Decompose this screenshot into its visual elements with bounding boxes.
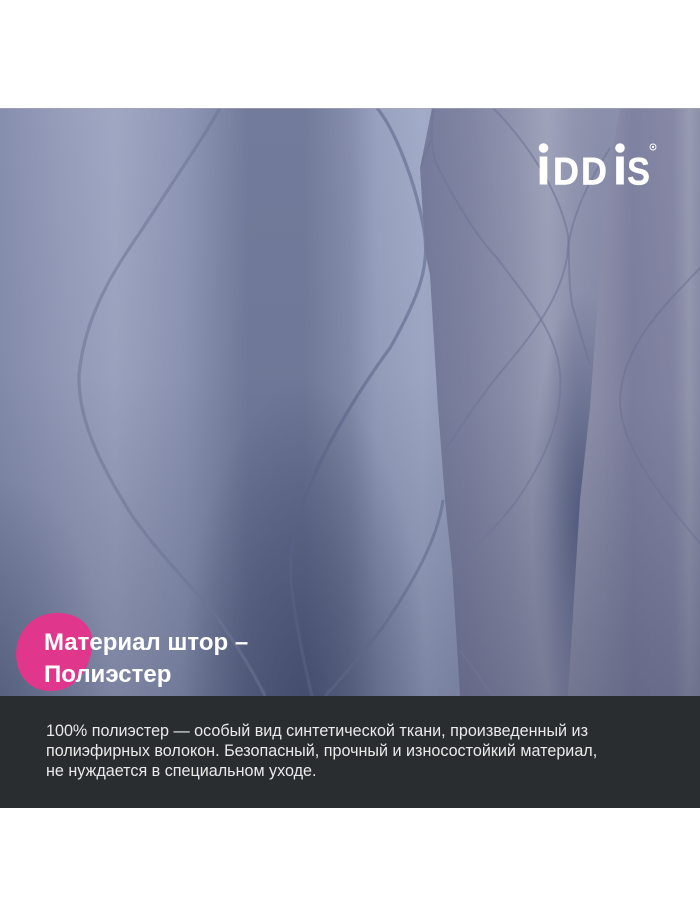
logo: IDDIS: i (536, 138, 551, 196)
logo: IDDIS (538, 143, 656, 186)
logo: IDDIS: D (581, 150, 607, 194)
description text (46, 722, 597, 780)
description text: полиэфирных волокон. Безопасный, прочный и износостойкий материал, (46, 742, 597, 760)
heading: Полиэстер (44, 661, 171, 688)
heading: Материал штор – (44, 629, 248, 656)
heading (44, 629, 248, 688)
wave line: lower fold curve (325, 500, 443, 696)
curtain panel: large left fold (0, 108, 470, 696)
logo: IDDIS: i (612, 138, 628, 196)
curtain panel: far right fold (560, 108, 700, 696)
description band (0, 696, 700, 808)
photo: curtain fabric with wave pattern (0, 108, 700, 696)
description text: 100% полиэстер — особый вид синтетической ткани, произведенный из (46, 722, 588, 740)
wave line: left curve (79, 108, 265, 696)
logo: IDDIS: S (627, 150, 650, 194)
logo: IDDIS: D (553, 150, 579, 194)
wave line: fold curve (291, 108, 426, 696)
description text: не нуждается в специальном уходе. (46, 762, 317, 780)
top edge highlight (0, 108, 700, 109)
pink accent blob (16, 613, 92, 691)
curtain panel: middle fold (420, 108, 610, 696)
